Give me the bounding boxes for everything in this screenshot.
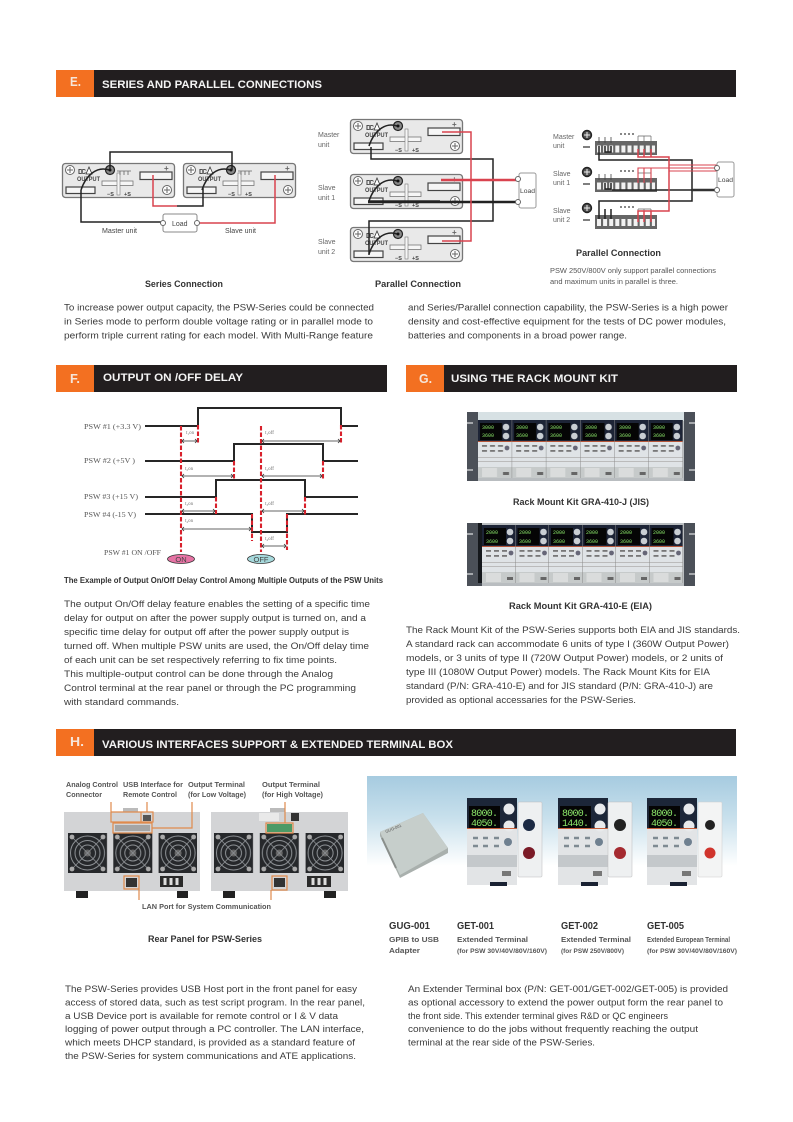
timing chart: output on/off delay: t₄off [265, 537, 274, 542]
parallel connection diagram (output terminals): OUTPUT [365, 240, 388, 247]
section E header [56, 70, 736, 97]
text block: output delay: turned off. When multiple PSW units are used, the On/Off delay time [64, 641, 369, 652]
text block: interfaces: access of stored data, such as test script program. In the rear panel, [65, 998, 365, 1008]
text block: rack mount kit: type III (1080W Output Power) models. The Rack Mount Kits for EIA [406, 667, 711, 678]
photo: rack mount kit EIA: 3600 [553, 539, 565, 545]
parallel connection diagram (output terminals): −S [395, 203, 402, 209]
accessory label: GUG-001: GPIB to USB [389, 937, 439, 944]
accessory label: GET-001: GET-001 [457, 921, 494, 932]
rear panel connector labels: Analog Control [66, 782, 118, 789]
parallel connection diagram (terminal strips): Load [718, 177, 733, 184]
photo: GET-002 terminal: 1440. [562, 819, 589, 830]
photo: rack mount kit JIS: 3000 [585, 425, 597, 431]
accessory label: GUG-001: Adapter [389, 948, 420, 955]
section H header: H. [70, 734, 84, 749]
accessory label: GET-002: Extended Terminal [561, 937, 631, 944]
photo: rack mount kit JIS: 3600 [550, 433, 562, 439]
series connection diagram: Load [172, 221, 188, 228]
photo: GET-002 terminal [558, 798, 632, 886]
text block: output delay: specific time delay for output off after the power supply output is [64, 627, 349, 638]
rear panel connector labels: USB Interface for [123, 782, 183, 789]
timing chart: output on/off delay: PSW #1 ON /OFF [104, 548, 161, 557]
parallel connection diagram (terminal strips): Master [553, 134, 575, 141]
photo: rack mount kit EIA: 2000 [586, 530, 598, 536]
parallel connection diagram (output terminals): DC [366, 180, 374, 187]
label: LAN port: LAN Port for System Communication [142, 904, 271, 911]
accessory label: GET-005: Extended European Terminal [647, 937, 730, 944]
series connection diagram: +S [245, 192, 252, 198]
chart caption: The Example of Output On/Off Delay Control Among Multiple Outputs of the PSW Units [64, 576, 384, 585]
photo: GET-001 terminal [467, 798, 542, 886]
accessory label: GUG-001: GUG-001 [389, 921, 430, 932]
photo: rack mount kit EIA: 3600 [519, 539, 531, 545]
section G header [406, 365, 737, 392]
text block: extender terminal: the front side. This extender terminal gives R&D or QC engineers [408, 1011, 668, 1022]
photo: GET-005 terminal: 4050. [651, 819, 678, 830]
text block: interfaces: logging of power output through a PC controller. The LAN interface, [65, 1024, 364, 1035]
photo: rack mount kit JIS: 3600 [482, 433, 494, 439]
photo: GUG-001 adapter: GUG-001 [385, 823, 403, 834]
photo: GET-001 terminal: 8000. [471, 809, 498, 820]
text block: interfaces: The PSW-Series provides USB Host port in the front panel for easy [65, 984, 357, 995]
parallel connection diagram (output terminals): + [452, 120, 457, 129]
series connection diagram: Slave unit [225, 228, 256, 235]
photo: rack mount kit JIS: 3600 [619, 433, 631, 439]
parallel connection diagram (output terminals): Slave [318, 185, 336, 192]
caption: GRA-410-E: Rack Mount Kit GRA-410-E (EIA) [509, 601, 652, 611]
accessory label: GET-005 [647, 921, 737, 955]
timing chart: output on/off delay: t₂off [265, 467, 274, 472]
note: parallel limits: and maximum units in parallel is three. [550, 277, 678, 286]
parallel connection diagram (terminal strips): unit 1 [553, 180, 570, 187]
parallel connection diagram (output terminals): OUTPUT [365, 132, 388, 139]
photo: GUG-001 adapter [380, 813, 448, 878]
series connection diagram: −S [228, 192, 235, 198]
text block: output delay: with standard commands. [63, 697, 179, 708]
text block: output delay [63, 599, 370, 708]
parallel connection diagram (output terminals): DC [366, 125, 374, 132]
text block: rack mount kit: standard (P/N: GRA-410-E) and for JIS standard (P/N: GRA-410-J) are [406, 681, 713, 692]
parallel connection diagram (output terminals): unit 1 [318, 195, 335, 202]
caption: series connection: Series Connection [145, 279, 223, 289]
text block: rack mount kit [406, 625, 740, 706]
photo: rack mount kit EIA: 2000 [653, 530, 665, 536]
text block: series/parallel right: and Series/Parallel connection capability, the PSW-Series is a high power [408, 302, 729, 314]
photo: rear panel high voltage [211, 802, 348, 900]
rear panel connector labels: Remote Control [123, 792, 177, 799]
rear panel connector labels: (for Low Voltage) [188, 792, 246, 799]
timing chart: output on/off delay: t₁off [265, 431, 274, 436]
timing chart: output on/off delay: PSW #3 (+15 V) [84, 492, 139, 501]
rear panel connector labels: Output Terminal [262, 782, 320, 789]
text block: interfaces: the PSW-Series for system communications and ATE applications. [65, 1051, 356, 1062]
timing chart: output on/off delay: t₁on [186, 431, 195, 436]
accessory banner background [367, 776, 737, 896]
parallel connection diagram (output terminals): −S [395, 256, 402, 262]
timing chart: output on/off delay: OFF [254, 555, 269, 564]
section E header: E. [70, 74, 81, 89]
caption: rear panel: Rear Panel for PSW-Series [148, 934, 262, 944]
photo: rack mount kit EIA: 2000 [519, 530, 531, 536]
parallel connection diagram (output terminals): +S [412, 256, 419, 262]
parallel connection diagram (output terminals): −S [395, 148, 402, 154]
rear panel connector labels [66, 782, 323, 799]
parallel connection diagram (output terminals): + [452, 175, 457, 184]
parallel connection diagram (terminal strips): Slave [553, 171, 571, 178]
accessory label: GET-005: GET-005 [647, 921, 684, 932]
text block: output delay: The output On/Off delay feature enables the setting of a specific time [64, 599, 370, 610]
series connection diagram: Master unit [102, 228, 137, 235]
rear panel connector labels: Connector [66, 792, 102, 799]
photo: rack mount kit JIS: 3000 [516, 425, 528, 431]
accessory label: GET-001: (for PSW 30V/40V/80V/160V) [457, 949, 547, 955]
accessory label: GET-001: Extended Terminal [457, 937, 528, 944]
section H header: VARIOUS INTERFACES SUPPORT & EXTENDED TERMINAL BOX [102, 739, 454, 751]
text block: rack mount kit: provided as optional accessaries for the PSW-Series. [406, 695, 636, 706]
section F header: F. [70, 371, 80, 386]
section G header: USING THE RACK MOUNT KIT [451, 373, 618, 385]
text block: extender terminal: terminal at the rear side of the PSW-Series. [408, 1038, 595, 1048]
parallel connection diagram (output terminals): Master [318, 132, 340, 139]
photo: rack mount kit EIA: 3600 [653, 539, 665, 545]
photo: GET-005 terminal [647, 798, 722, 886]
photo: GET-005 terminal: 8000. [651, 809, 678, 820]
timing chart: output on/off delay: t₄on [185, 519, 194, 524]
series connection diagram: + [164, 164, 169, 173]
series connection diagram: −S [107, 192, 114, 198]
section F header: OUTPUT ON /OFF DELAY [103, 372, 244, 384]
rear panel connector labels: Output Terminal [188, 782, 245, 789]
text block: output delay: of each unit can be set respectively referring to fix time points. [64, 655, 337, 666]
timing chart: output on/off delay: PSW #2 (+5V ) [84, 456, 136, 465]
section H header [56, 729, 736, 756]
parallel connection diagram (output terminals): OUTPUT [365, 187, 388, 194]
text block: rack mount kit: The Rack Mount Kit of the PSW-Series supports both EIA and JIS standards. [406, 625, 740, 636]
photo: rack mount kit JIS: 3000 [653, 425, 665, 431]
text block: interfaces: which meets DHCP standard, is provided as a standard feature of [64, 1038, 355, 1048]
text block: series/parallel left [64, 302, 374, 342]
caption: parallel connection, rear terminals: Parallel Connection [576, 248, 661, 258]
parallel connection diagram (output terminals): Slave [318, 239, 336, 246]
accessory label: GET-001 [457, 921, 547, 955]
parallel connection diagram (output terminals): +S [412, 203, 419, 209]
photo: rack mount kit EIA: 3600 [586, 539, 598, 545]
series connection diagram: DC [199, 169, 207, 176]
text block: series/parallel left: perform triple current rating for each model. With Multi-Range feature [64, 330, 373, 342]
accessory label: GET-002 [561, 921, 631, 955]
photo: rack mount kit JIS: 3000 [619, 425, 631, 431]
photo: rack mount kit EIA [467, 523, 695, 586]
caption: parallel connection: Parallel Connection [375, 279, 461, 289]
text block: series/parallel right [408, 302, 729, 342]
section E header: SERIES AND PARALLEL CONNECTIONS [102, 79, 322, 91]
text block: interfaces: a USB Device port is available for remote control or I & V data [65, 1011, 339, 1022]
rear panel connector labels: (for High Voltage) [262, 792, 323, 799]
note: parallel limits: PSW 250V/800V only support parallel connections [550, 266, 716, 275]
parallel connection diagram (output terminals): +S [412, 148, 419, 154]
photo: GET-001 terminal: 4050. [471, 819, 498, 830]
text block: rack mount kit: A standard rack can accommodate 6 units of type I (360W Output Power) [406, 639, 729, 650]
photo: rear panel low voltage [64, 802, 200, 900]
timing chart: output on/off delay: t₂on [185, 467, 194, 472]
timing chart: output on/off delay: t₃on [185, 502, 194, 507]
parallel connection diagram (output terminals): + [452, 228, 457, 237]
text block: series/parallel right: density and cost-effective equipment for the tests of DC power modules, [408, 316, 726, 328]
parallel connection diagram (output terminals) [318, 120, 536, 262]
note: parallel limits [550, 266, 716, 286]
text block: output delay: This multiple-output control can be done through the Analog [64, 669, 333, 680]
photo: rack mount kit EIA: 3600 [486, 539, 498, 545]
photo: rack mount kit EIA: 2000 [553, 530, 565, 536]
text block: extender terminal [408, 984, 728, 1048]
parallel connection diagram (output terminals): DC [366, 233, 374, 240]
parallel connection diagram (output terminals): unit [318, 142, 329, 149]
series connection diagram [62, 152, 296, 235]
parallel connection diagram (terminal strips) [553, 130, 734, 229]
text block: extender terminal: An Extender Terminal box (P/N: GET-001/GET-002/GET-005) is provided [408, 984, 728, 995]
accessory label: GUG-001 [389, 921, 439, 955]
timing chart: output on/off delay: PSW #4 (-15 V) [84, 510, 137, 519]
series connection diagram: OUTPUT [77, 176, 100, 183]
series connection diagram: OUTPUT [198, 176, 221, 183]
photo: rack mount kit EIA: 2000 [486, 530, 498, 536]
timing chart: output on/off delay: ON [175, 555, 187, 564]
photo: rack mount kit JIS: 3600 [653, 433, 665, 439]
series connection diagram: DC [78, 169, 86, 176]
photo: rack mount kit EIA: 3600 [620, 539, 632, 545]
caption: GRA-410-J: Rack Mount Kit GRA-410-J (JIS) [513, 497, 649, 507]
photo: rack mount kit EIA: 2000 [620, 530, 632, 536]
photo: rack mount kit JIS: 3600 [516, 433, 528, 439]
accessory label: GET-005: (for PSW 30V/40V/80V/160V) [647, 949, 737, 955]
photo: rack mount kit JIS: 3000 [482, 425, 494, 431]
timing chart: output on/off delay [84, 408, 358, 564]
section G header: G. [419, 371, 432, 386]
timing chart: output on/off delay: PSW #1 (+3.3 V) [84, 422, 142, 431]
accessory label: GET-002: GET-002 [561, 921, 598, 932]
text block: series/parallel left: in Series mode to perform double voltage rating or in parallel mode to [64, 316, 373, 328]
text block: series/parallel right: batteries and components in a broad power range. [408, 330, 627, 342]
text block: output delay: delay for output on after the power supply output is turned on, and a [64, 613, 367, 624]
photo: rack mount kit JIS: 3000 [550, 425, 562, 431]
photo: GET-002 terminal: 8000. [562, 809, 589, 820]
parallel connection diagram (terminal strips): unit [553, 143, 564, 150]
series connection diagram: +S [124, 192, 131, 198]
text block: rack mount kit: models, or 3 units of type II (720W Output Power) models, or 2 units of [406, 653, 723, 664]
parallel connection diagram (terminal strips): unit 2 [553, 217, 570, 224]
text block: interfaces [64, 984, 365, 1062]
accessory label: GET-002: (for PSW 250V/800V) [561, 949, 624, 955]
text block: series/parallel left: To increase power output capacity, the PSW-Series could be connected [64, 302, 374, 314]
photo: rack mount kit JIS: 3600 [585, 433, 597, 439]
section F header [56, 365, 387, 392]
text block: extender terminal: convenience to do the jobs without frequently reaching the output [408, 1024, 698, 1035]
series connection diagram: + [285, 164, 290, 173]
text block: extender terminal: as optional accessory to extend the power output form the rear panel to [408, 998, 723, 1008]
timing chart: output on/off delay: t₃off [265, 502, 274, 507]
parallel connection diagram (output terminals): Load [520, 188, 535, 195]
parallel connection diagram (output terminals): unit 2 [318, 249, 335, 256]
text block: output delay: Control terminal at the rear panel or through the PC programming [64, 683, 356, 694]
photo: rack mount kit JIS [467, 412, 695, 481]
parallel connection diagram (terminal strips): Slave [553, 208, 571, 215]
